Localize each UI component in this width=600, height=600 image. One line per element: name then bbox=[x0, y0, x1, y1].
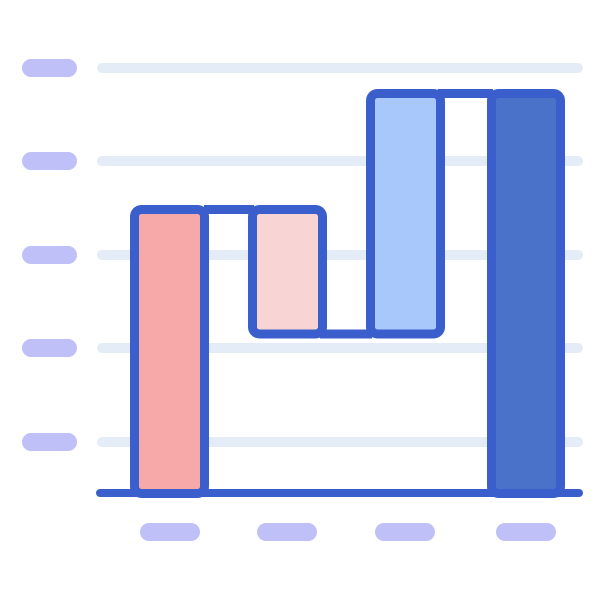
bar 3 bbox=[370, 94, 440, 334]
bar 4 bbox=[492, 94, 560, 494]
bar 2 bbox=[252, 210, 322, 334]
connectors bbox=[204, 94, 493, 334]
y-axis labels bbox=[22, 59, 77, 451]
bar 1 bbox=[134, 210, 204, 494]
x-axis labels bbox=[140, 523, 556, 541]
baseline bbox=[100, 489, 579, 497]
